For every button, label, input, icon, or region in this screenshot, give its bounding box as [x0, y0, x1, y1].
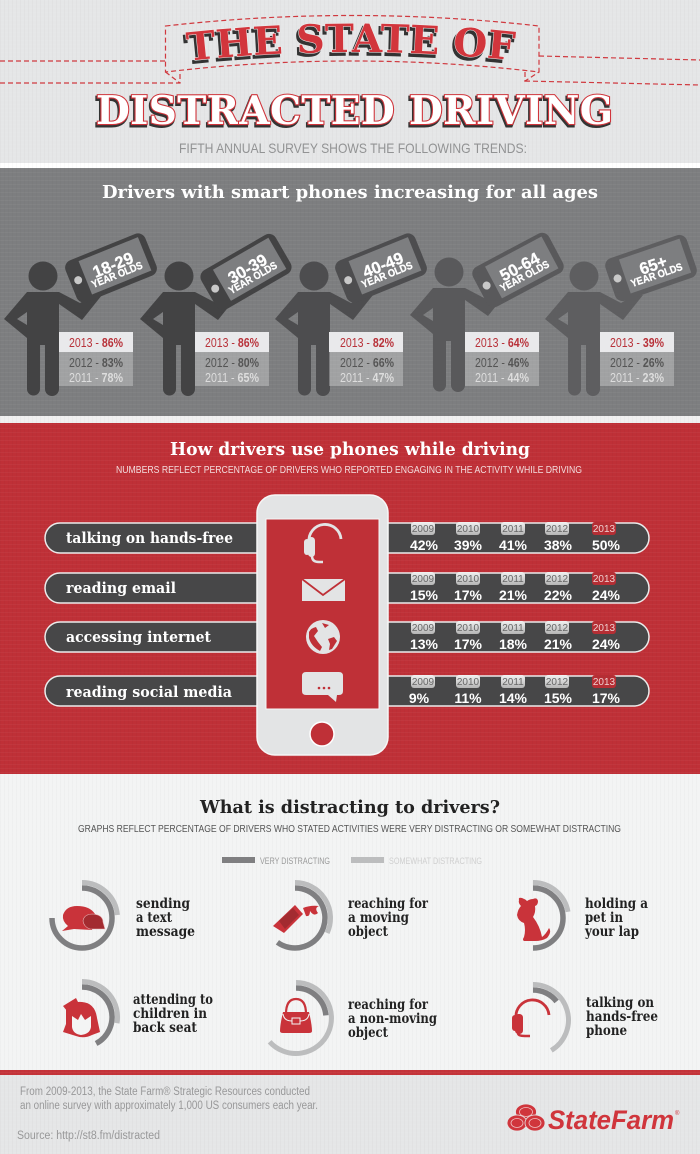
- stats: 65+: 2011 - 23%: [610, 371, 664, 385]
- pill row: talking on hands-free: 39%: [454, 537, 483, 553]
- stats: 50-64: [465, 332, 539, 386]
- pill row: accessing internet: 24%: [592, 636, 621, 652]
- stats: 30-39: [195, 332, 269, 386]
- figure: 65+: 65+: [637, 253, 670, 279]
- logo: State Farm: ®: [675, 1110, 680, 1117]
- stats: 30-39: 2011 - 65%: [205, 371, 259, 385]
- label: pet in: [585, 910, 623, 926]
- pill row: accessing internet: [45, 621, 649, 652]
- label: reaching for: [348, 896, 429, 912]
- figure: 50-64: 50-64: [497, 249, 544, 285]
- title: distracted driving: DISTRACTED DRIVING: [95, 90, 612, 136]
- figure: 18-29: 18-29: [90, 249, 136, 282]
- label: attending to: [133, 992, 213, 1008]
- label: reaching for: [348, 997, 429, 1013]
- icon: dog: [517, 898, 550, 941]
- pill row: reading email: 2012: [546, 574, 569, 585]
- heading: smart phones: Drivers with smart phones increasing for all ages: [102, 182, 598, 203]
- figure: 30-39: [140, 231, 294, 396]
- pill row: reading email: reading email: [66, 580, 176, 597]
- stats: 40-49: 2011 - 47%: [340, 371, 394, 385]
- background: header: [0, 0, 700, 163]
- pill row: reading social media: 14%: [499, 690, 528, 706]
- pill row: reading email: 15%: [410, 587, 439, 603]
- pill row: talking on hands-free: [45, 522, 649, 553]
- footer: source: Source: http://st8.fm/distracted: [17, 1130, 160, 1142]
- label: a text: [136, 910, 173, 926]
- stats: 50-64: 2011 - 44%: [475, 371, 529, 385]
- pill row: reading social media: 15%: [544, 690, 573, 706]
- pill row: reading social media: 2010: [457, 677, 480, 688]
- pill row: accessing internet: 13%: [410, 636, 439, 652]
- pill row: accessing internet: 2010: [457, 623, 480, 634]
- stats: 65+: 2012 - 26%: [610, 356, 664, 370]
- stats: 65+: 2013 - 39%: [610, 336, 664, 350]
- icon: chat bubbles: [62, 906, 105, 931]
- pill row: reading email: 21%: [499, 587, 528, 603]
- pill row: reading email: 2010: [457, 574, 480, 585]
- icon: envelope: [302, 579, 345, 601]
- pill row: reading email: 17%: [454, 587, 483, 603]
- heading: what is distracting: What is distracting to drivers?: [199, 797, 500, 818]
- icon: spilling cup: [273, 905, 319, 933]
- legend: [222, 856, 482, 866]
- footer: survey note: From 2009-2013, the State Farm® Strategic Resources conducted: [20, 1086, 310, 1098]
- icon: globe: [306, 620, 340, 654]
- figure: 65+: YEAR OLDS: [629, 261, 684, 290]
- label: holding a: [585, 896, 648, 912]
- label: your lap: [584, 924, 639, 940]
- icon: chat bubble: [302, 672, 343, 702]
- pill row: talking on hands-free: 2010: [457, 524, 480, 535]
- pill row: talking on hands-free: 41%: [499, 537, 528, 553]
- ring: sending a text message: [52, 882, 195, 948]
- background: white section: [0, 774, 700, 1070]
- stats: 40-49: 2013 - 82%: [340, 336, 394, 350]
- pill row: accessing internet: 2012: [546, 623, 569, 634]
- pill row: reading social media: 2011: [502, 677, 524, 688]
- heading: phone use: How drivers use phones while driving: [170, 439, 530, 460]
- pill row: talking on hands-free: 38%: [544, 537, 573, 553]
- title: distracted driving: DISTRACTED DRIVING: [96, 88, 613, 134]
- pill row: reading social media: 9%: [409, 690, 430, 706]
- stats: 30-39: 2012 - 80%: [205, 356, 259, 370]
- stats: 40-49: [329, 332, 403, 386]
- label: a moving: [348, 910, 409, 926]
- label: a non-moving: [348, 1011, 437, 1027]
- figure: 30-39: 30-39: [225, 251, 271, 288]
- stats: 40-49: 2012 - 66%: [340, 356, 394, 370]
- figure: 30-39: YEAR OLDS: [227, 260, 279, 297]
- figure: 50-64: YEAR OLDS: [498, 259, 552, 295]
- ring: holding a pet: [517, 882, 648, 948]
- subheading: phone use: NUMBERS REFLECT PERCENTAGE OF DRIVERS WHO REPORTED ENGAGING IN THE ACTIVITY WHILE DRIVING: [116, 464, 582, 476]
- pill row: talking on hands-free: 2013: [593, 524, 616, 535]
- icon: child: [63, 998, 100, 1037]
- label: message: [136, 924, 195, 940]
- figure: 50-64: [410, 230, 567, 392]
- label: talking on: [586, 995, 654, 1011]
- pill row: reading social media: 2013: [593, 677, 616, 688]
- ring: reaching for a non-moving object: [270, 982, 437, 1054]
- icon: purse: [280, 999, 312, 1033]
- ring: talking on hands-free phone: [512, 984, 658, 1050]
- footer: survey note: an online survey with approximately 1,000 US consumers each year.: [20, 1100, 318, 1112]
- label: phone: [586, 1023, 627, 1039]
- pill row: accessing internet: 2009: [412, 623, 435, 634]
- figure: 40-49: 40-49: [360, 249, 406, 282]
- background: grey section: [0, 168, 700, 416]
- ring: attending to children: [63, 982, 213, 1044]
- pill row: reading social media: 2012: [546, 677, 569, 688]
- pill row: reading email: 22%: [544, 587, 573, 603]
- figure: 40-49: [275, 231, 429, 396]
- icon: headset: [512, 1000, 549, 1036]
- pill row: talking on hands-free: talking on hands-free: [66, 530, 233, 547]
- pill row: reading email: 2011: [502, 574, 524, 585]
- legend: VERY DISTRACTING: [260, 856, 330, 866]
- pill row: accessing internet: 2013: [593, 623, 616, 634]
- pill row: reading social media: 2009: [412, 677, 435, 688]
- pill row: reading email: [45, 572, 649, 603]
- legend: SOMEWHAT DISTRACTING: [389, 856, 482, 866]
- ring: reaching for a moving object: [273, 882, 429, 948]
- title: the state of: THE STATE OF: [185, 23, 516, 61]
- stats: 18-29: [59, 332, 133, 386]
- stats: 18-29: 2013 - 86%: [69, 336, 123, 350]
- label: children in: [133, 1006, 207, 1022]
- pill row: reading email: 2009: [412, 574, 435, 585]
- pill row: reading email: 24%: [592, 587, 621, 603]
- pill row: talking on hands-free: 50%: [592, 537, 621, 553]
- label: object: [348, 924, 389, 940]
- pill row: accessing internet: 18%: [499, 636, 528, 652]
- label: back seat: [133, 1020, 198, 1036]
- background: red section: [0, 423, 700, 774]
- pill row: accessing internet: accessing internet: [66, 629, 211, 646]
- pill row: talking on hands-free: 42%: [410, 537, 439, 553]
- footer: survey note: [20, 1086, 318, 1112]
- stats: 50-64: 2012 - 46%: [475, 356, 529, 370]
- pill row: reading social media: 11%: [454, 690, 482, 706]
- figure: 40-49: YEAR OLDS: [360, 260, 414, 291]
- pill row: accessing internet: 21%: [544, 636, 573, 652]
- banner: dashed ribbon: [0, 16, 700, 85]
- title: the state of: THE STATE OF: [182, 26, 514, 64]
- pill row: reading social media: 17%: [592, 690, 621, 706]
- pill row: accessing internet: 2011: [502, 623, 524, 634]
- pill row: reading email: 2013: [593, 574, 616, 585]
- subtitle: FIFTH ANNUAL SURVEY SHOWS THE FOLLOWING TRENDS:: [179, 140, 527, 156]
- label: hands-free: [586, 1009, 658, 1025]
- stats: 50-64: 2013 - 64%: [475, 336, 529, 350]
- pill row: reading social media: [45, 675, 649, 706]
- pill row: talking on hands-free: 2009: [412, 524, 435, 535]
- label: sending: [136, 896, 191, 912]
- pill row: talking on hands-free: 2011: [502, 524, 524, 535]
- stats: 30-39: 2013 - 86%: [205, 336, 259, 350]
- icon: headset: [304, 524, 341, 562]
- stats: 18-29: 2011 - 78%: [69, 371, 123, 385]
- stats: 18-29: 2012 - 83%: [69, 356, 123, 370]
- pill row: talking on hands-free: 2012: [546, 524, 569, 535]
- stats: 65+: [600, 332, 674, 386]
- figure: 65+: [545, 233, 699, 396]
- pill row: reading social media: reading social media: [66, 684, 233, 701]
- figure: 18-29: [4, 231, 159, 396]
- logo: State Farm: StateFarm: [548, 1105, 674, 1135]
- background: footer: [0, 1075, 700, 1154]
- label: object: [348, 1025, 389, 1041]
- pill row: accessing internet: 17%: [454, 636, 483, 652]
- smartphone: [257, 495, 388, 755]
- figure: 18-29: YEAR OLDS: [90, 260, 144, 291]
